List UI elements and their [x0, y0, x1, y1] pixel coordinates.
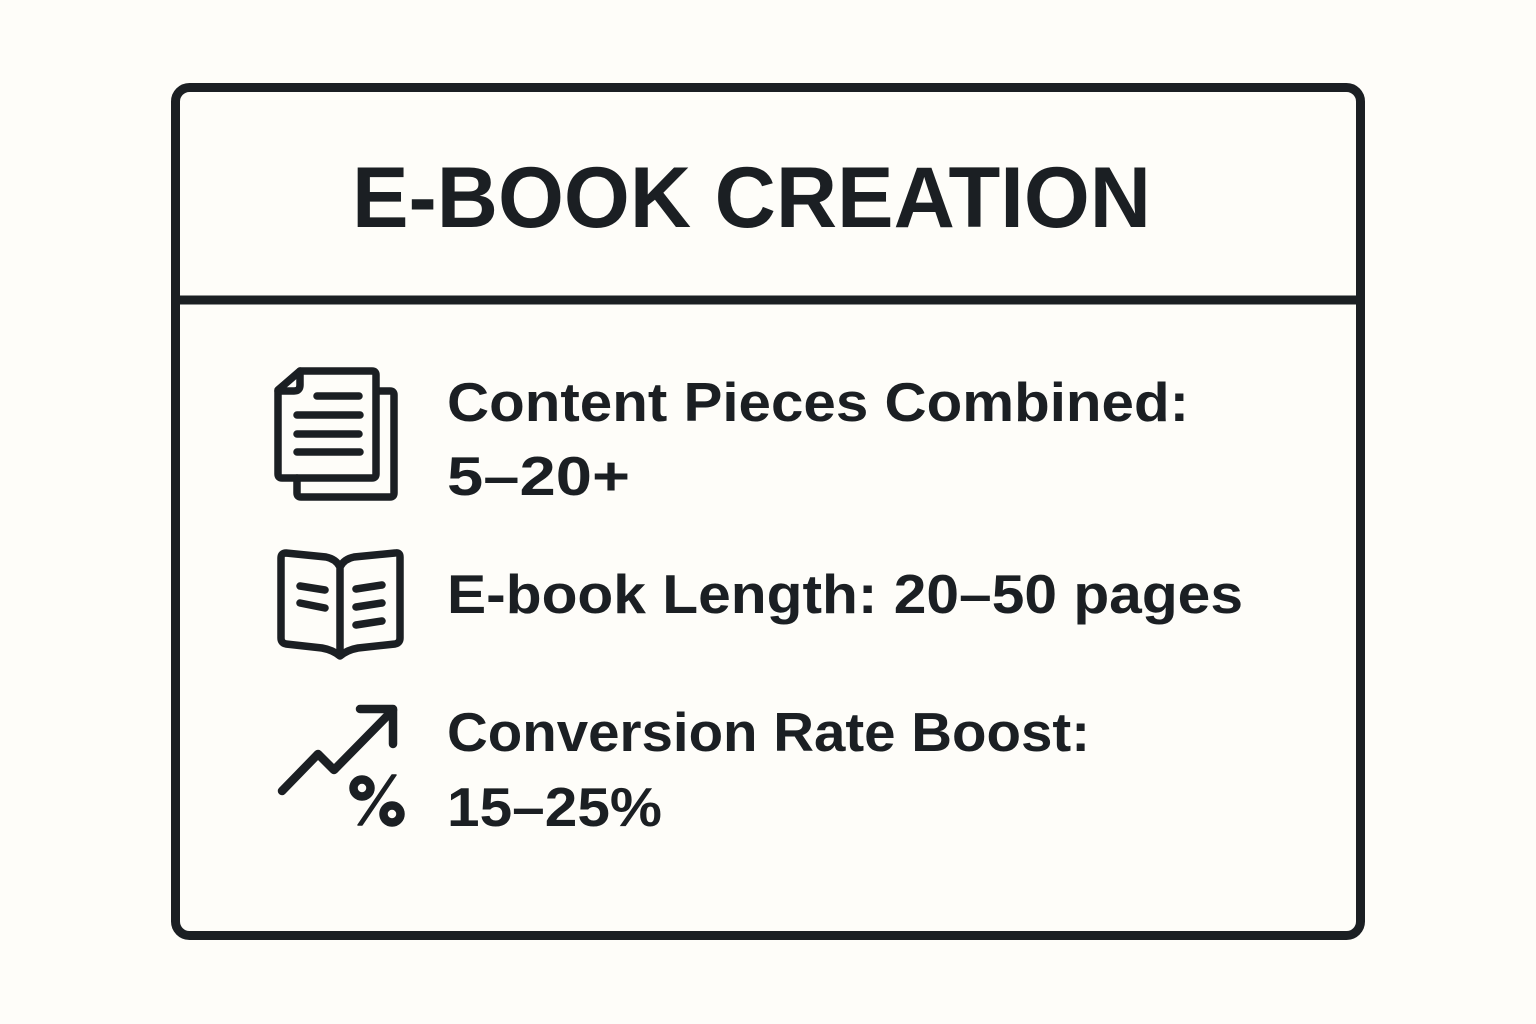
text: e-book length: E-book Length: 20–50 pages	[447, 563, 1243, 625]
icon: stacked documents	[278, 371, 394, 497]
text: conversion rate boost: Conversion Rate Boost:	[447, 701, 1090, 763]
text: content pieces combined: 5–20+	[447, 445, 630, 507]
title: E-BOOK CREATION	[352, 150, 1151, 246]
text: content pieces combined	[447, 371, 1189, 507]
icon: open book	[281, 553, 400, 656]
text: conversion rate boost	[447, 701, 1090, 838]
text: conversion rate boost: 15–25%	[447, 776, 662, 838]
text: content pieces combined: Content Pieces Combined:	[447, 371, 1189, 433]
icon: rising arrow with percent	[282, 709, 400, 825]
panel: e-book creation card	[176, 88, 1360, 936]
